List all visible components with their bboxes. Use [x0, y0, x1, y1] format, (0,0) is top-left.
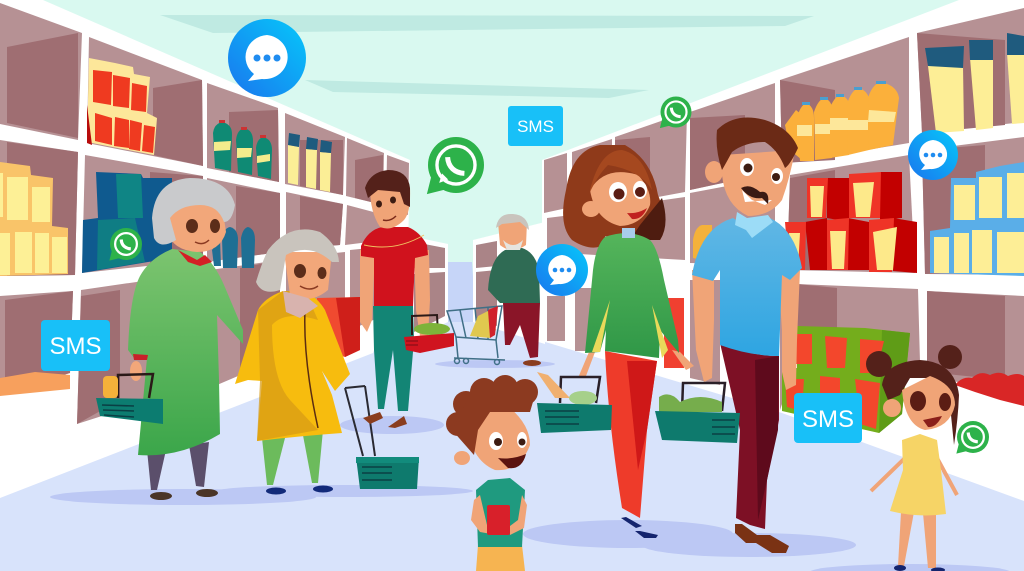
tall cream boxes — [925, 33, 1024, 133]
person: boy — [446, 375, 538, 571]
blue bottles — [212, 227, 255, 268]
red box stacks — [87, 58, 157, 155]
legs — [262, 430, 323, 485]
shirt — [476, 478, 525, 547]
hand — [130, 361, 142, 381]
red boxes — [785, 172, 917, 273]
shopping cart — [447, 306, 505, 364]
person: woman in green top — [563, 145, 694, 538]
person: girl in yellow dress — [866, 345, 962, 571]
hair — [256, 229, 339, 292]
head — [902, 376, 955, 430]
head — [466, 406, 530, 470]
shoes — [621, 517, 658, 538]
head — [498, 222, 527, 250]
top shelf cells — [0, 3, 409, 424]
collar — [735, 212, 773, 238]
face — [294, 264, 326, 289]
ear — [705, 161, 723, 183]
hair — [496, 214, 529, 230]
arms — [471, 495, 527, 535]
icon: messenger large — [228, 19, 306, 97]
face — [376, 196, 396, 220]
shoes — [150, 489, 218, 500]
person: grandmother in yellow coat — [235, 229, 350, 495]
shoes — [363, 412, 407, 428]
top — [585, 233, 679, 358]
hair — [152, 178, 235, 245]
badge: SMS left: SMS — [49, 333, 102, 360]
panel: left shelves — [0, 0, 410, 498]
badge: SMS top — [508, 106, 563, 146]
orange bottles — [785, 81, 899, 161]
ear — [160, 220, 172, 236]
face — [186, 219, 220, 244]
trolley basket — [345, 386, 419, 489]
floor — [0, 320, 1024, 571]
ear — [582, 201, 600, 217]
icon: whatsapp bottom right — [956, 421, 989, 454]
hair front — [590, 150, 652, 192]
hair — [882, 360, 959, 445]
shoe — [523, 360, 541, 366]
face — [910, 391, 951, 427]
person: grandmother in green coat — [128, 178, 243, 500]
shelf back walls — [5, 33, 383, 424]
trousers — [503, 303, 540, 358]
green crates — [782, 326, 910, 433]
hair back — [563, 145, 665, 248]
head — [284, 252, 332, 299]
basket: woman's green basket — [537, 372, 612, 433]
legs — [898, 512, 936, 568]
eyes — [609, 181, 647, 202]
icon: whatsapp top right — [660, 96, 692, 128]
shirt — [692, 218, 802, 356]
hair — [717, 118, 798, 170]
basket: man's green basket — [655, 383, 740, 443]
panel: right shelves — [542, 0, 1024, 501]
dark hair shade — [630, 198, 666, 240]
trousers — [373, 306, 414, 411]
back walls — [615, 33, 1005, 380]
face — [489, 432, 527, 468]
yellow tubes — [288, 133, 332, 192]
scarf — [283, 291, 318, 318]
blue boxes — [930, 162, 1024, 276]
hair — [365, 170, 410, 207]
legs — [147, 442, 209, 490]
head — [370, 188, 410, 228]
person: old man with shopping cart — [488, 214, 541, 366]
arms — [692, 270, 800, 390]
icon: whatsapp left — [109, 228, 142, 261]
shirt — [361, 227, 428, 306]
beard — [503, 240, 523, 250]
coat — [235, 291, 350, 441]
trousers — [605, 351, 657, 518]
head — [590, 172, 650, 226]
head — [722, 150, 795, 216]
shelf yellow bottle — [693, 225, 712, 262]
dark blue boxes — [82, 172, 172, 273]
eyes — [740, 158, 783, 184]
cup — [487, 505, 510, 535]
yellow boxes — [0, 162, 68, 276]
ear — [454, 451, 470, 465]
basket: red hand basket — [404, 315, 454, 353]
badge: SMS right — [794, 393, 862, 443]
tomatoes — [955, 373, 1024, 406]
mouth — [627, 208, 647, 219]
shorts — [476, 545, 525, 571]
ceiling — [0, 0, 1024, 300]
neck — [622, 228, 635, 238]
floor shadows — [50, 360, 1010, 571]
far shelves — [410, 222, 545, 344]
moustache and mouth — [741, 186, 772, 205]
green bottles — [213, 120, 272, 179]
person: man in red shirt — [360, 170, 430, 428]
trousers — [720, 343, 779, 529]
basket: green hand basket — [96, 374, 163, 424]
arms — [578, 350, 694, 378]
ear — [883, 399, 901, 417]
arms — [360, 250, 430, 336]
shoes — [266, 486, 333, 494]
cells — [544, 8, 1024, 410]
head — [168, 205, 226, 252]
far aisle floor — [442, 262, 476, 322]
shoes — [894, 565, 945, 571]
hair — [446, 375, 538, 455]
bread — [0, 372, 70, 396]
red bag behind woman — [664, 298, 684, 368]
icon: whatsapp large — [427, 137, 484, 194]
dress — [890, 434, 946, 515]
badge: SMS left — [41, 320, 110, 371]
coat — [128, 249, 243, 455]
jacket — [488, 248, 540, 303]
arms — [871, 458, 957, 495]
collar — [178, 250, 212, 266]
ceiling light strips — [160, 15, 814, 98]
icon: messenger right — [908, 130, 958, 180]
red bag — [317, 297, 360, 357]
badge: SMS top: SMS — [517, 117, 554, 136]
hair buns — [866, 345, 962, 377]
icon: messenger centre — [536, 244, 588, 296]
badge: SMS right: SMS — [802, 406, 854, 433]
shoes — [735, 524, 789, 553]
person: man in blue shirt — [692, 118, 802, 553]
